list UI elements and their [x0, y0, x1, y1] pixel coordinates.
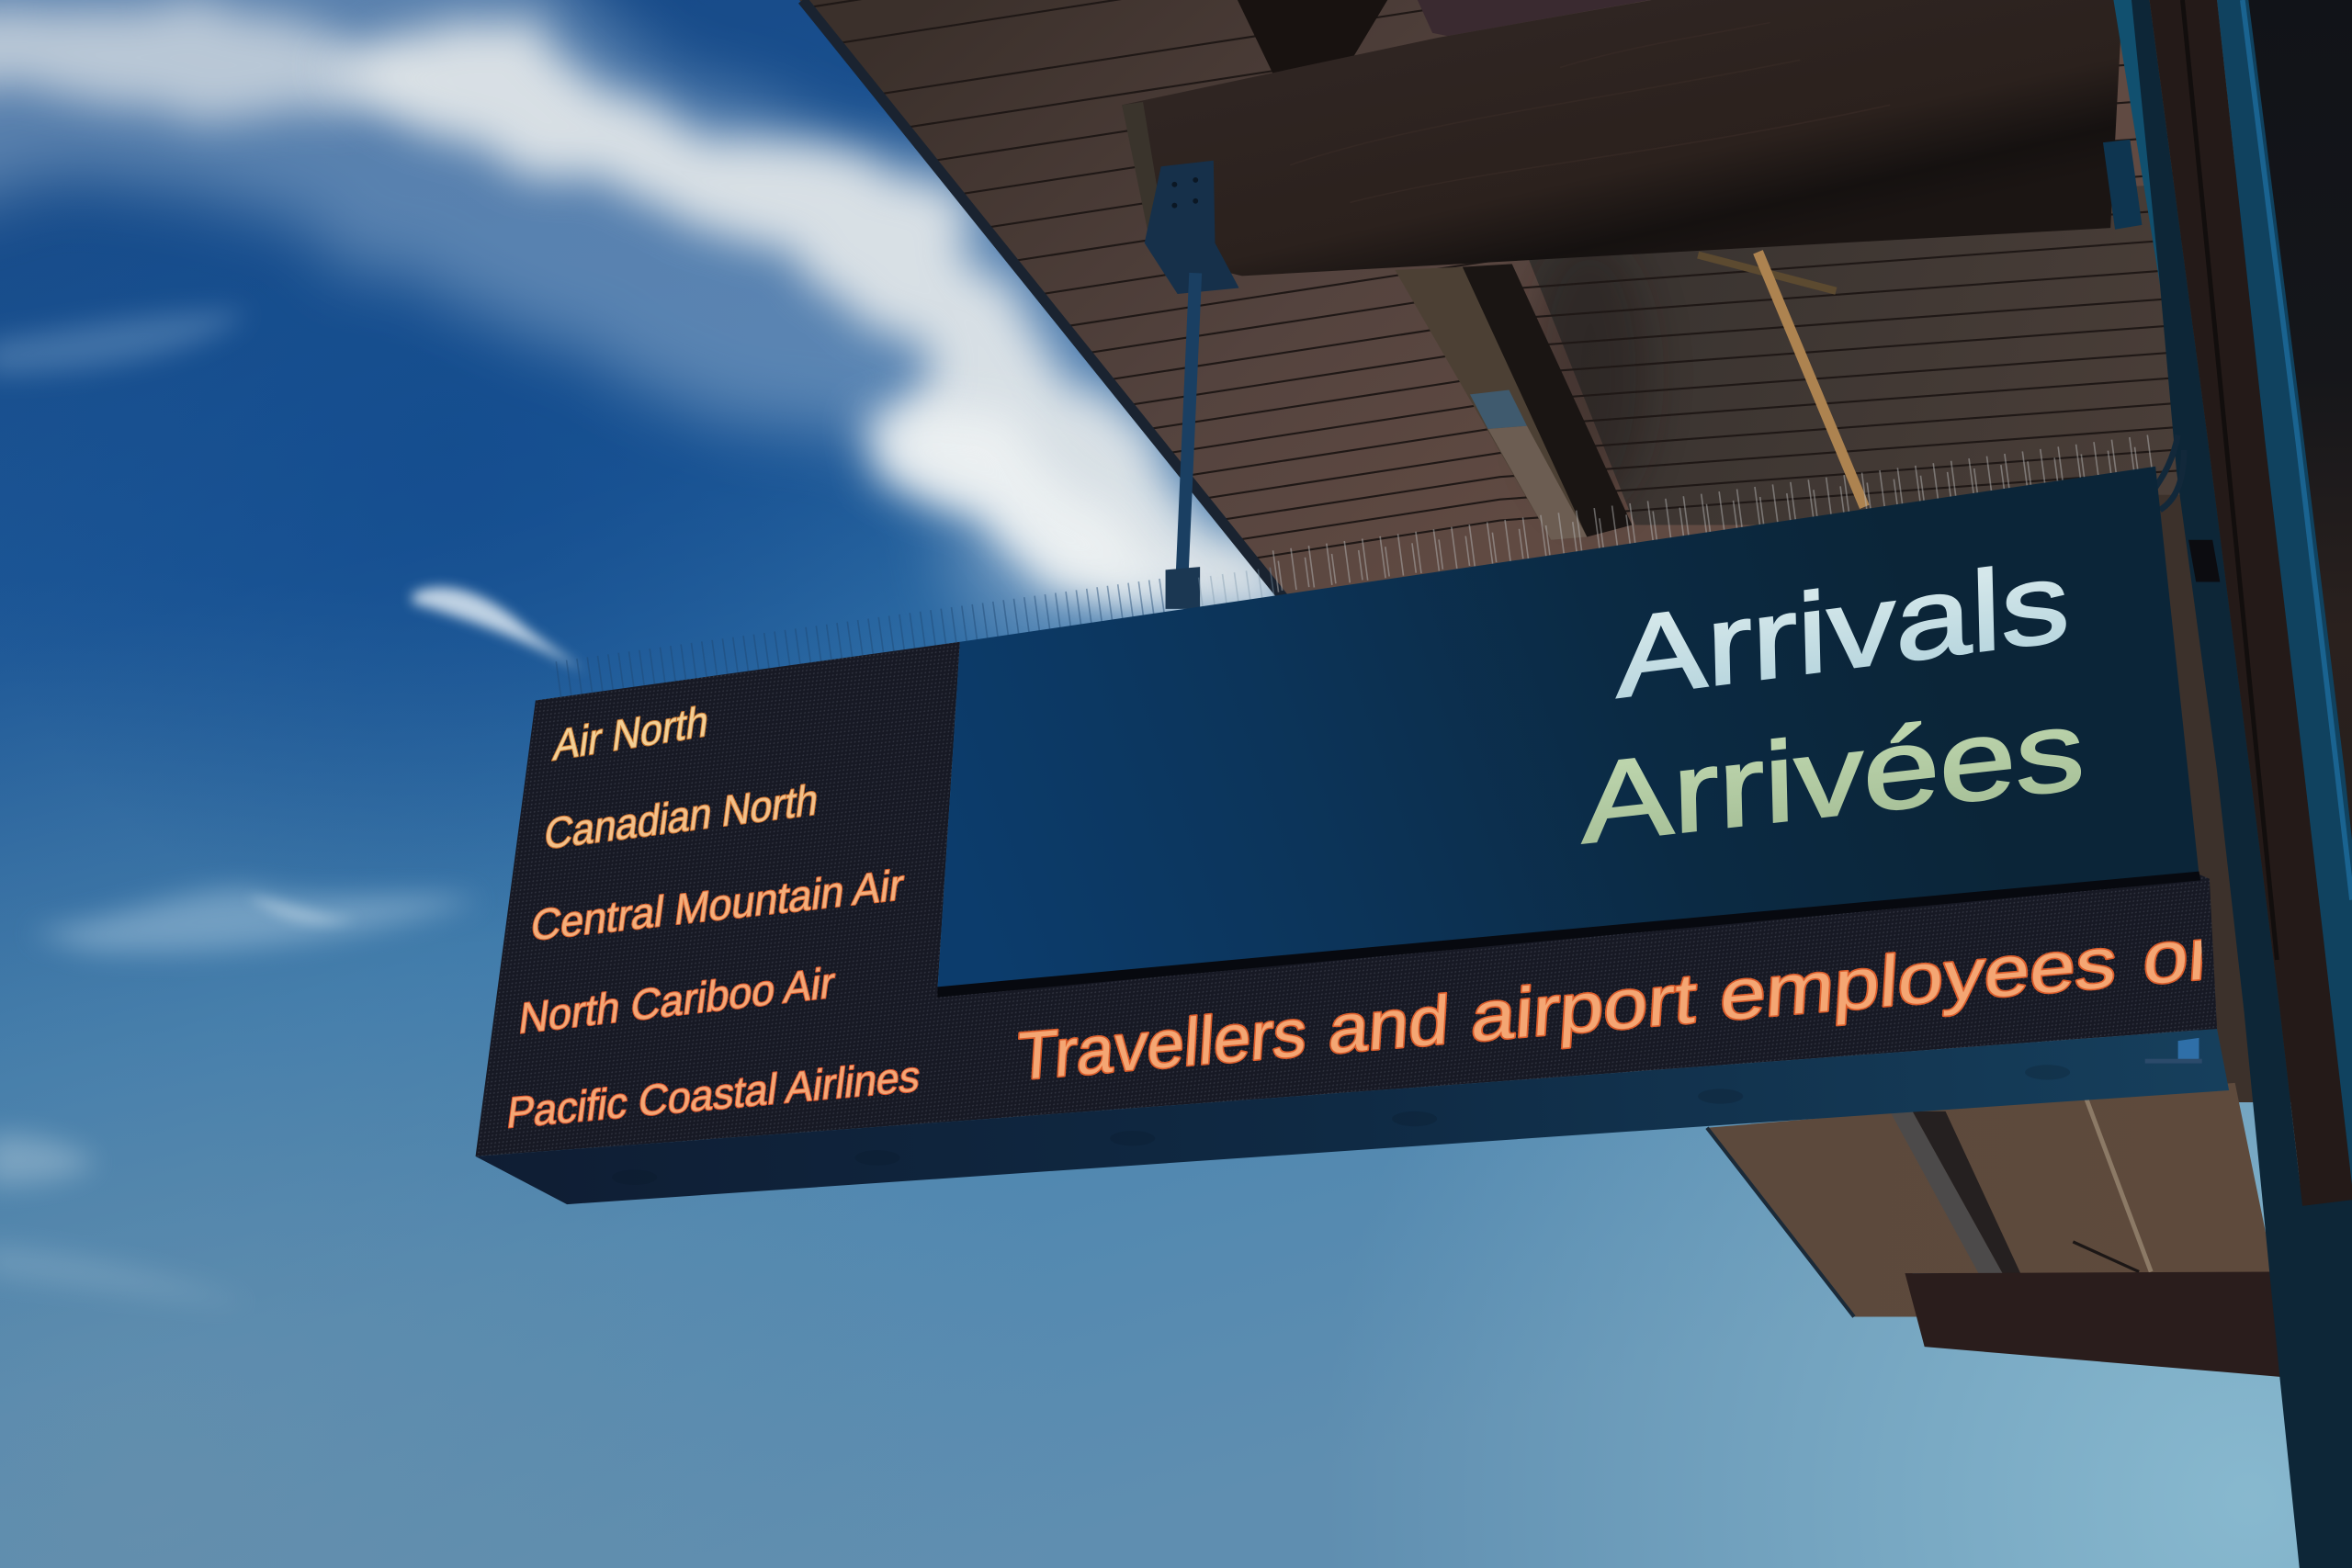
airline: Air North: Air North: [550, 697, 711, 771]
speaker grilles: [612, 1065, 2070, 1185]
heading: Arrivées: Arrivées: [1580, 686, 2086, 868]
sign underside: [476, 1029, 2229, 1204]
led display: airline list and ticker background: [476, 642, 2217, 1156]
airline: Canadian North: Canadian North: [542, 776, 821, 859]
scrolling ticker: on: [2141, 909, 2236, 999]
scrolling ticker: [1018, 939, 2202, 1080]
cross beam under roof: [1395, 264, 1632, 540]
bird spikes: [558, 455, 2160, 681]
clouds: [0, 0, 1350, 1304]
hanger rod and bracket: [1145, 161, 1239, 609]
scrolling ticker: Travellers: [1014, 994, 1308, 1095]
airline: Central Mountain Air: Central Mountain Air: [528, 861, 907, 951]
airline: Pacific Coastal Airlines: Pacific Coastal Airlines: [504, 1053, 923, 1138]
lower roof section: [1707, 1083, 2280, 1377]
scrolling ticker: employees: [1718, 921, 2119, 1035]
heading: Arrivals: Arrivals: [1614, 538, 2071, 722]
copper pipe: [1698, 252, 1864, 507]
arrivals sign: [476, 467, 2236, 1204]
airline: North Cariboo Air: North Cariboo Air: [516, 959, 838, 1043]
blue header panel: [937, 467, 2199, 990]
panel bottom shadow: [937, 872, 2200, 998]
scrolling ticker: and: [1327, 981, 1452, 1068]
scrolling ticker: airport: [1469, 959, 1699, 1056]
roof soffit: upper wooden planks: [750, 0, 2295, 1102]
manufacturer logo: [2145, 1038, 2202, 1064]
structural column: [2103, 0, 2352, 1568]
main timber beam: [1122, 0, 2122, 276]
